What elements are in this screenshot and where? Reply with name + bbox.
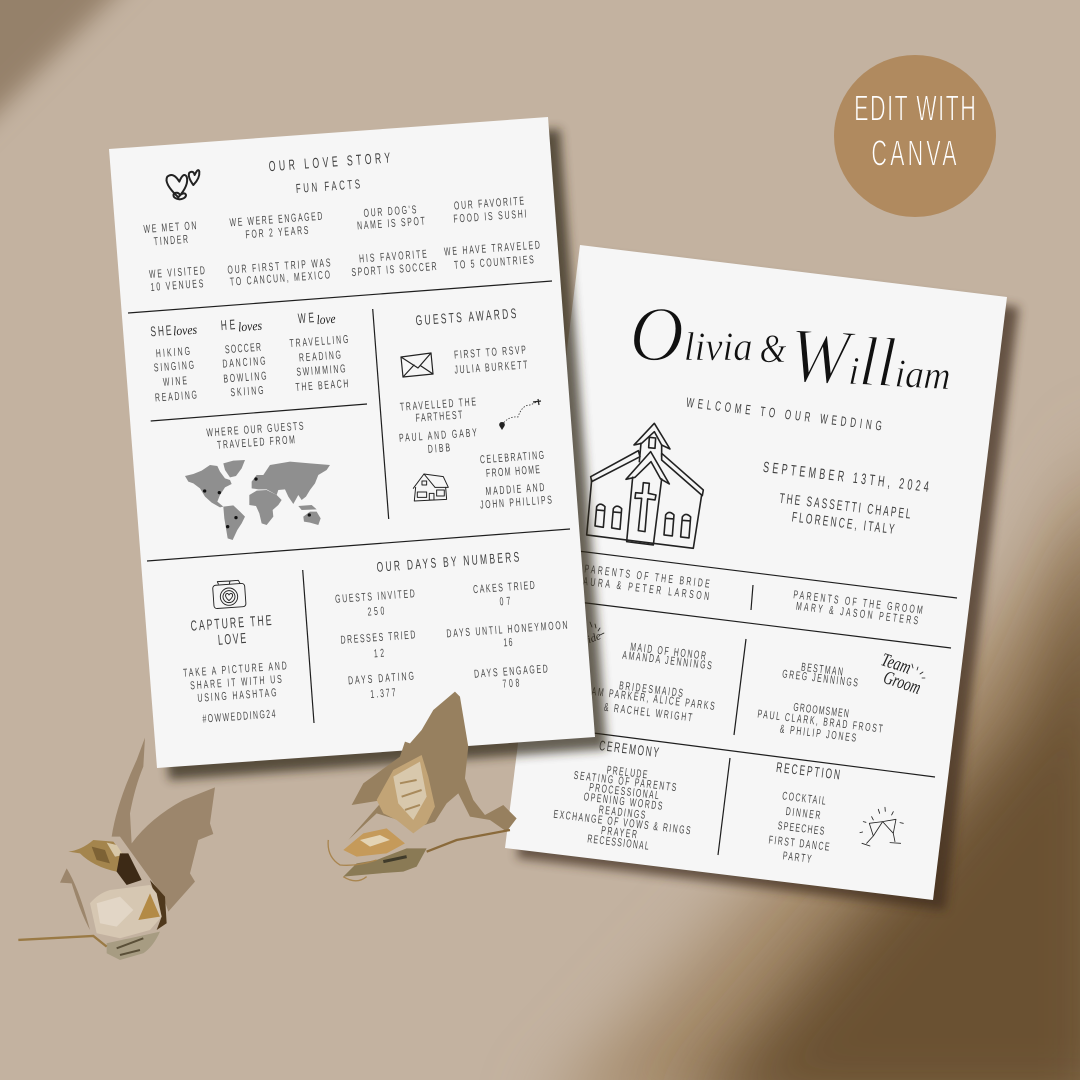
she loves list: HIKING <box>155 345 191 361</box>
award: travelled the farthest: TRAVELLED THE <box>400 396 476 414</box>
we love list: THE BEACH <box>295 377 349 395</box>
icon: team groom script: Team <box>878 649 914 679</box>
she loves list: loves <box>172 322 198 338</box>
award: first to rsvp: FIRST TO RSVP <box>454 344 526 362</box>
heading: couple names <box>630 290 954 406</box>
icon: house <box>413 474 448 501</box>
icon: camera <box>213 580 246 609</box>
bridal party: MAID OF HONOR <box>629 641 707 663</box>
ceremony list: CEREMONY <box>598 739 660 761</box>
he loves list: loves <box>237 318 263 334</box>
capture the love: CAPTURE THE <box>190 612 272 634</box>
numbers grid: GUESTS INVITED <box>335 587 415 607</box>
numbers grid: DAYS DATING <box>348 670 414 688</box>
heading: where our guests traveled from: TRAVELED FROM <box>217 434 295 452</box>
fun facts grid: OUR FAVORITE <box>454 195 524 213</box>
reception list: RECEPTION <box>775 761 841 783</box>
bridal party: BRIDESMAIDS <box>618 680 684 700</box>
she loves list <box>150 322 198 405</box>
award: first to rsvp <box>454 344 528 377</box>
fun facts grid: OUR DOG'S <box>363 203 417 221</box>
groom party: GREG JENNINGS <box>781 668 859 690</box>
ceremony list: RECESSIONAL <box>587 833 649 853</box>
numbers grid: 12 <box>373 647 385 661</box>
badge: edit with canva <box>834 55 996 217</box>
reception list: SPEECHES <box>777 820 825 838</box>
she loves list: SINGING <box>153 359 195 375</box>
heading: guests awards: GUESTS AWARDS <box>415 307 517 329</box>
groom party <box>757 661 883 745</box>
capture the love <box>183 612 287 726</box>
heading: fun facts: FUN FACTS <box>295 177 361 197</box>
award: celebrating from home: MADDIE AND <box>485 481 545 499</box>
he loves list: SOCCER <box>225 341 262 357</box>
world map with pins <box>185 460 330 540</box>
fun facts grid: 10 VENUES <box>150 277 204 295</box>
award: celebrating from home: JOHN PHILLIPS <box>480 494 552 512</box>
icon: team bride fragment: Bride <box>575 630 603 650</box>
fun facts grid: TO 5 COUNTRIES <box>454 253 534 273</box>
he loves list: DANCING <box>222 355 266 371</box>
icon: envelope <box>401 353 433 377</box>
numbers grid <box>335 579 568 702</box>
numbers grid: DAYS UNTIL HONEYMOON <box>446 619 568 641</box>
fun facts grid: OUR FIRST TRIP WAS <box>227 257 331 277</box>
parents of the bride: PARENTS OF THE BRIDE <box>584 563 710 591</box>
he loves list: HE <box>220 318 236 334</box>
bridal party <box>585 641 715 725</box>
capture the love: #OWWEDDING24 <box>202 708 276 726</box>
bridal party: SAM PARKER, ALICE PARKS <box>585 685 715 713</box>
event details <box>762 458 930 537</box>
he loves list: BOWLING <box>223 370 267 386</box>
capture the love: USING HASHTAG <box>197 686 277 706</box>
heading: couple names: William <box>787 311 954 406</box>
groom party: & PHILIP JONES <box>779 723 857 745</box>
heading: where our guests traveled from: WHERE OUR GUESTS <box>206 420 304 440</box>
numbers grid: DRESSES TRIED <box>340 629 416 647</box>
reception list <box>768 761 841 866</box>
subtitle: welcome: WELCOME TO OUR WEDDING <box>685 396 883 434</box>
award: first to rsvp: JULIA BURKETT <box>454 359 528 377</box>
we love list: SWIMMING <box>296 363 346 379</box>
award: celebrating from home <box>479 449 552 512</box>
capture the love: SHARE IT WITH US <box>190 673 282 693</box>
ceremony list: PRELUDE <box>606 764 648 782</box>
title: our love story: OUR LOVE STORY <box>268 149 391 175</box>
we love list: READING <box>299 349 341 365</box>
award: travelled the farthest: PAUL AND GABY <box>399 426 478 445</box>
capture the love: LOVE <box>217 630 247 648</box>
fun facts grid: WE HAVE TRAVELED <box>444 239 540 259</box>
we love list: WE <box>297 311 315 327</box>
ceremony list: READINGS <box>598 804 646 822</box>
fun facts grid: WE MET ON <box>143 219 197 237</box>
badge: edit with canva: EDIT WITH <box>854 89 976 129</box>
numbers grid: 07 <box>499 595 511 609</box>
numbers grid: 1.377 <box>370 686 396 702</box>
groom party: PAUL CLARK, BRAD FROST <box>757 708 883 736</box>
shadow of left card <box>121 129 607 780</box>
reception list: FIRST DANCE <box>768 834 830 854</box>
icon: champagne glasses <box>860 807 903 846</box>
reception list: PARTY <box>782 850 813 866</box>
we love list: TRAVELLING <box>289 333 349 351</box>
numbers grid: CAKES TRIED <box>473 579 535 597</box>
fun facts grid: FOOD IS SUSHI <box>453 208 527 226</box>
ceremony list: OPENING WORDS <box>583 791 663 813</box>
heading: couple names: & <box>760 326 786 371</box>
fun facts grid: FOR 2 YEARS <box>245 224 309 242</box>
numbers grid: 708 <box>502 677 520 691</box>
we love list: love <box>316 311 336 327</box>
award: celebrating from home: FROM HOME <box>486 463 540 481</box>
dried flower left with shadow <box>18 738 215 960</box>
event details: FLORENCE, ITALY <box>791 511 895 537</box>
fun facts grid: TO CANCUN, MEXICO <box>230 269 330 289</box>
fun facts grid: TINDER <box>153 233 189 249</box>
icon: team bride fragment <box>575 622 604 650</box>
dried flower right with shadow <box>328 692 517 881</box>
ceremony list: PRAYER <box>600 824 638 842</box>
groom party: BESTMAN <box>800 661 844 679</box>
reception list: DINNER <box>785 805 821 823</box>
groom party: GROOMSMEN <box>792 701 850 721</box>
heading: couple names: Olivia <box>630 290 752 377</box>
numbers grid: 16 <box>503 636 513 650</box>
heading: our days by numbers: OUR DAYS BY NUMBERS <box>376 551 520 575</box>
icon: plane route <box>499 399 541 430</box>
award: travelled the farthest: FARTHEST <box>415 409 463 425</box>
award: celebrating from home: CELEBRATING <box>479 449 545 467</box>
fun facts grid: WE VISITED <box>149 264 205 282</box>
bridal party: & RACHEL WRIGHT <box>603 701 693 725</box>
award: travelled the farthest <box>399 396 478 456</box>
ceremony list: EXCHANGE OF VOWS & RINGS <box>553 808 691 838</box>
reception list: COCKTAIL <box>781 790 827 808</box>
icon: team groom script: Groom <box>881 667 923 699</box>
panel: left card our love story <box>109 117 595 768</box>
event details: THE SASSETTI CHAPEL <box>779 492 912 522</box>
fun facts grid: HIS FAVORITE <box>359 248 427 266</box>
badge: edit with canva: CANVA <box>871 134 957 174</box>
icon: hearts <box>166 170 199 199</box>
he loves list: SKIING <box>230 384 264 400</box>
heading: where our guests traveled from <box>206 420 304 452</box>
event details: SEPTEMBER 13TH, 2024 <box>762 458 930 496</box>
award: travelled the farthest: DIBB <box>427 442 451 456</box>
parents of the groom: PARENTS OF THE GROOM <box>793 589 924 617</box>
ceremony list: PROCESSIONAL <box>588 781 660 803</box>
parents of the bride: LAURA & PETER LARSON <box>576 574 710 604</box>
she loves list: READING <box>155 389 197 405</box>
numbers grid: 250 <box>367 605 385 619</box>
bridal party: AMANDA JENNINGS <box>622 649 712 673</box>
fun facts grid <box>143 195 540 295</box>
ceremony list <box>553 739 691 853</box>
shadow of right card <box>517 255 1019 910</box>
parents of the groom: MARY & JASON PETERS <box>795 600 919 628</box>
she loves list: SHE <box>150 324 172 340</box>
she loves list: WINE <box>163 374 187 390</box>
fun facts grid: NAME IS SPOT <box>357 215 425 233</box>
fun facts grid: SPORT IS SOCCER <box>351 260 437 280</box>
numbers grid: DAYS ENGAGED <box>474 663 548 681</box>
icon: church <box>587 423 703 548</box>
icon: team groom script <box>878 649 925 699</box>
panel: right card wedding program <box>505 245 1007 900</box>
ceremony list: SEATING OF PARENTS <box>573 769 677 795</box>
we love list <box>289 311 349 395</box>
fun facts grid: WE WERE ENGAGED <box>229 210 323 230</box>
he loves list <box>220 318 267 400</box>
capture the love: TAKE A PICTURE AND <box>183 660 287 680</box>
